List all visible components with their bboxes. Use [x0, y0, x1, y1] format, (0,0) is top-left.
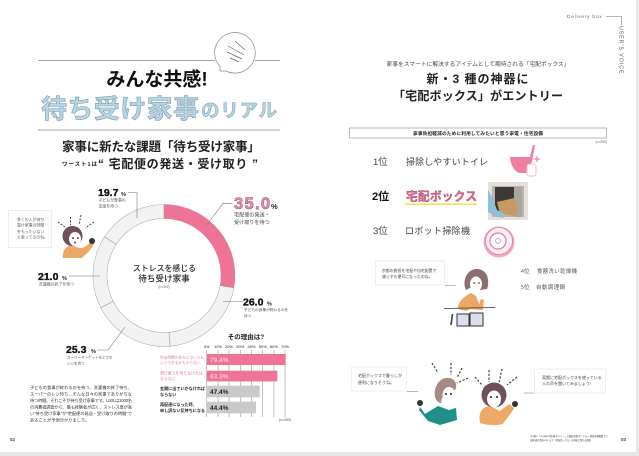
- body paragraph: あることが予測分かりました。: [30, 416, 90, 424]
- rank 2: 2位: [372, 189, 389, 203]
- bar chart: reasons: 60%: [270, 344, 278, 349]
- footnote: [530, 434, 608, 442]
- callout: 19.7%: %: [121, 192, 126, 198]
- rank 3: ロボット掃除機: [405, 225, 470, 236]
- callout: 19.7%: [98, 187, 137, 218]
- bar chart: reasons: その理由は?: [228, 332, 264, 341]
- body paragraph: 待つ時間。それこそが待ち受け家事です。LIXILは1000名: [30, 397, 132, 404]
- bar: 47.4%: 玄関に出ていかなければ: [160, 385, 206, 391]
- page number left: 02: [10, 437, 16, 442]
- callout: 35.0%: 受け取りを待つ: [234, 219, 270, 226]
- right heading: 「宅配ボックス」がエントリー: [393, 88, 563, 103]
- callout: 35.0%: 宅配便の発送・: [234, 212, 270, 218]
- rank 1: 1位: [373, 156, 388, 168]
- ranks 4 and 5: 5位: [521, 283, 530, 291]
- rank 2: [372, 189, 477, 205]
- subheading: 家事に新たな課題「待ち受け家事」: [62, 139, 260, 154]
- bar: 63.3%: 帰け買うを待たなければ: [160, 370, 203, 376]
- speech box: comparison: 減らすも便可になったのね。: [382, 274, 432, 279]
- donut center label: ストレスを感じる: [133, 263, 196, 273]
- callout: 21.0%: [38, 271, 100, 286]
- speech box: bottom right: 実際に宅配ボックスを使っている: [542, 374, 602, 380]
- speech box: bottom right: 人の声を聞いてみましょう!: [542, 380, 591, 386]
- callout: 35.0%: %: [271, 202, 278, 211]
- speech box: left page: 多くの人が待ち: [17, 217, 44, 222]
- section tag: Delivery box / USER'S VOICE: [567, 14, 624, 74]
- ranks 4 and 5: [521, 267, 578, 291]
- subheading: “ 宅配便の発送・受け取り ”: [98, 156, 258, 171]
- footnote: 出典:株式会社LIXIL より「宅配ボックス」の有無に関する調査: [530, 438, 592, 442]
- body paragraph: の消費者調査から、最も経験者が広く、ストレス度が高: [30, 404, 132, 410]
- bar: 47.4%: ならない: [160, 391, 176, 397]
- icon: speech bubble with scribble: [215, 32, 255, 73]
- rank 3: 3位: [373, 225, 388, 237]
- donut center label: 待ち受け家事: [138, 272, 190, 284]
- footnote: (※)調べ「2019年2月実施 ダイナミック調査(宅配ボックス)」調査実施機関 より: [530, 434, 608, 438]
- icon: woman reading: [444, 269, 495, 326]
- bar: 79.4%: レジでまるかもからない: [160, 360, 201, 365]
- bar: 79.4%: 外出時間の休み上でいても: [160, 354, 204, 360]
- icon: woman in teal: [417, 363, 468, 425]
- callout: 25.3%: スーパーマーケットなどでの: [67, 354, 113, 360]
- bar chart: reasons: 40%: [247, 344, 256, 349]
- survey title box: (n=300): [596, 140, 607, 144]
- bar: 79.4%: [160, 354, 286, 365]
- bar chart: reasons: 30%: [236, 344, 245, 349]
- icon: woman in orange: [475, 369, 518, 425]
- speech box: left page: [8, 210, 52, 248]
- speech box: comparison: [376, 261, 456, 286]
- subheading: [62, 139, 260, 171]
- rank 2: 宅配ボックス: [406, 190, 477, 204]
- right heading: 新・3 種の神器に: [426, 71, 530, 86]
- body paragraph: 子どもの食事が終わるのを待つ、洗濯機の終了待ち、: [30, 384, 132, 391]
- subheading: ワースト1は: [62, 161, 97, 168]
- callout: 19.7%: 支度を待つ: [98, 204, 118, 208]
- bar: 47.4%: 47.4%: [210, 389, 229, 396]
- survey title box: 家事負担軽減のために利用してみたいと思う家電・住宅設備: [413, 130, 543, 137]
- title: のリアル: [201, 100, 277, 121]
- section tag: Delivery box / USER'S VOICE: USER'S VOICE: [618, 26, 624, 74]
- title: 待ち受け家事: [41, 94, 199, 124]
- bar chart: reasons: 20%: [225, 344, 233, 349]
- bar chart: reasons: (n=260): [279, 418, 291, 422]
- title: [41, 68, 277, 124]
- callout: 25.3%: 25.3: [66, 344, 87, 356]
- ranks 4 and 5: 食器洗い乾燥機: [537, 267, 578, 275]
- speech box: bottom left: [352, 367, 418, 392]
- bar chart: reasons: 0%: [204, 344, 210, 349]
- speech box: bottom left: 便利になりそうね。: [358, 379, 394, 385]
- speech box: comparison: 京都の負担を宅配や自宅配置で: [382, 268, 437, 273]
- callout: 26.0%: [223, 296, 289, 318]
- callout: 26.0%: 26.0: [243, 296, 264, 308]
- survey title box: [350, 128, 607, 144]
- callout: 25.3%: [66, 327, 125, 366]
- ranks 4 and 5: 4位: [521, 267, 530, 275]
- donut center label: [133, 263, 196, 289]
- right heading: [386, 60, 570, 103]
- speech box: bottom right: [524, 369, 606, 393]
- bar: 47.4%: [160, 385, 260, 397]
- callout: 21.0%: 洗濯機の終了を待つ: [39, 282, 74, 286]
- speech box: bottom left: 宅配ボックスで暮らしが: [358, 372, 402, 378]
- callout: 35.0%: 35.0: [234, 195, 270, 213]
- rank 3: [373, 225, 470, 237]
- speech box: left page: をもったいない: [17, 229, 44, 234]
- donut center label: (n=300): [158, 285, 170, 289]
- bar chart: reasons: 70%: [281, 344, 289, 349]
- bar: 63.3%: 63.3%: [210, 374, 229, 380]
- photo: delivery box: [488, 182, 528, 220]
- bar chart: reasons: 10%: [214, 344, 222, 349]
- bar: 63.3%: ならない: [160, 376, 176, 381]
- page number right: 03: [621, 437, 627, 442]
- bar: 63.3%: [160, 370, 277, 381]
- rank 1: 掃除しやすいトイレ: [406, 156, 488, 167]
- bar: 79.4%: 79.4%: [210, 357, 229, 364]
- body paragraph: スーパーのレジ待ち…そんな日々の家事でありがちな: [30, 390, 132, 398]
- bar: 44.4%: 44.4%: [210, 405, 229, 412]
- title: みんな共感!: [106, 68, 208, 90]
- speech box: left page: 受け家事の時間: [17, 222, 44, 228]
- callout: 26.0%: %: [267, 302, 272, 308]
- rank 1: [373, 156, 488, 168]
- bar: 44.4%: 申し訳ない気持ちになる: [160, 407, 205, 413]
- callout: 19.7%: 子どもが食事の: [98, 198, 126, 202]
- donut chart: [100, 204, 235, 346]
- body paragraph: [30, 384, 132, 424]
- right heading: 家事をスマートに解決するアイテムとして期待される「宅配ボックス」: [386, 60, 570, 68]
- bar chart: reasons: [160, 332, 291, 422]
- callout: 25.3%: %: [91, 349, 96, 355]
- callout: 21.0%: 21.0: [38, 271, 59, 283]
- body paragraph: い“待ち受け家事”が“宅配便の発送・受け取りの時間”で: [30, 410, 132, 417]
- callout: 25.3%: レジを待つ: [67, 360, 85, 366]
- bar: 44.4%: [160, 401, 256, 413]
- callout: 21.0%: %: [62, 276, 67, 282]
- callout: 26.0%: 待つ: [244, 313, 252, 318]
- section tag: Delivery box / USER'S VOICE: Delivery box: [567, 14, 602, 20]
- icon: toilet: [510, 145, 541, 176]
- icon: woman with raised hand: [58, 215, 95, 258]
- callout: 26.0%: 子どもの食事が終わるのを: [244, 307, 289, 312]
- speech box: left page: と思ってるのね。: [17, 234, 48, 240]
- bar: 44.4%: 再配達になった時、: [160, 401, 197, 407]
- ranks 4 and 5: 自動調理鍋: [536, 283, 565, 291]
- bar chart: reasons: 50%: [259, 344, 267, 349]
- callout: 35.0%: [207, 195, 278, 226]
- callout: 19.7%: 19.7: [98, 187, 119, 199]
- icon: robot vacuum: [484, 226, 514, 258]
